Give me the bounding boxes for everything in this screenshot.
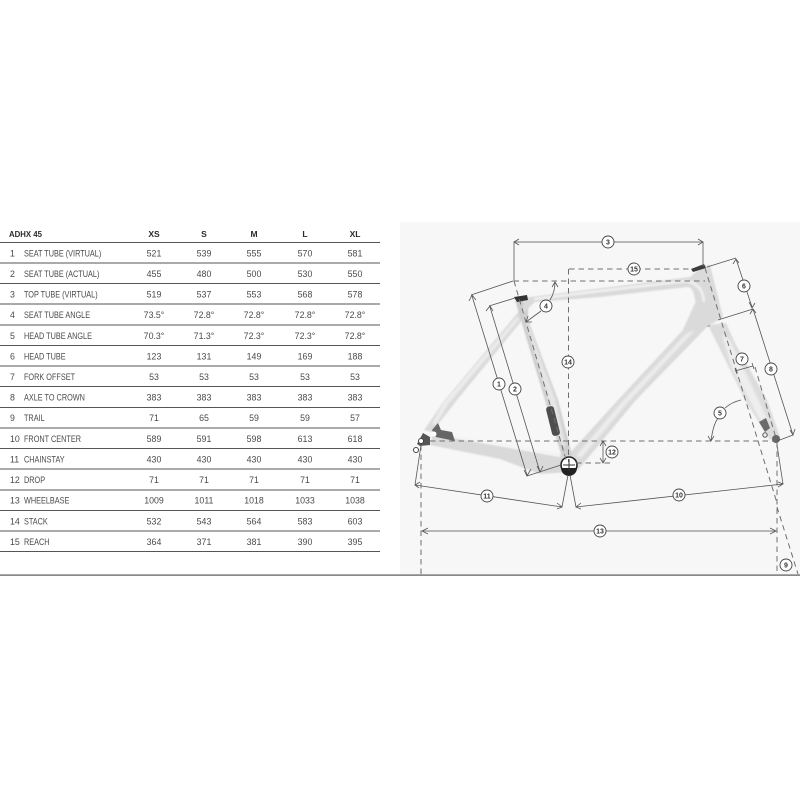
row 12 drop: 71: [300, 475, 310, 485]
dimension 7 fork offset: [735, 363, 754, 374]
table header: XL: [350, 229, 360, 239]
row 8 axle to crown: 383: [348, 392, 362, 402]
marker 14: 14: [564, 360, 572, 366]
row 3 top tube virtual: [10, 290, 362, 300]
marker 13: [594, 525, 606, 537]
dimension 8 axle to crown: [750, 309, 795, 441]
table header: M: [250, 229, 258, 239]
row 7 fork offset: 53: [149, 372, 159, 382]
row 12 drop: DROP: [24, 475, 45, 485]
marker 2: [509, 383, 521, 395]
row 1 seat tube virtual: 521: [147, 248, 161, 258]
marker 12: [606, 446, 618, 458]
row 10 front center: 598: [247, 434, 261, 444]
row 6 head tube: [10, 352, 362, 362]
row 5 head tube angle: 72.8°: [345, 331, 365, 341]
row 3 top tube virtual: 519: [147, 290, 161, 300]
row 4 seat tube angle: 72.8°: [345, 310, 365, 320]
row 5 head tube angle: 72.3°: [244, 331, 264, 341]
marker 12: 12: [608, 450, 616, 456]
row 8 axle to crown: 383: [247, 392, 261, 402]
marker 9: [780, 559, 792, 571]
row 15 reach: 390: [298, 537, 312, 547]
marker 4: 4: [544, 304, 548, 310]
row 12 drop: 71: [199, 475, 209, 485]
row 14 stack: STACK: [24, 517, 48, 527]
number markers: [481, 236, 792, 571]
row 10 front center: 613: [298, 434, 312, 444]
row 4 seat tube angle: 73.5°: [144, 310, 164, 320]
dimension 13 wheelbase: [422, 528, 776, 534]
dimension 2 seat tube actual: [486, 298, 543, 472]
row 10 front center: 591: [197, 434, 211, 444]
marker 7: 7: [740, 356, 744, 364]
row 14 stack: [10, 516, 362, 527]
marker 7: [736, 353, 748, 365]
row 8 axle to crown: 383: [147, 392, 161, 402]
marker 10: 10: [675, 492, 683, 500]
row 8 axle to crown: 8: [10, 392, 15, 402]
crosshair on bottom bracket: [563, 459, 575, 471]
row 11 chainstay: 430: [247, 454, 261, 464]
row 6 head tube: 131: [197, 352, 211, 362]
row 9 trail: 71: [149, 413, 159, 423]
marker 6: [738, 280, 750, 292]
table header: S: [201, 229, 207, 239]
row 7 fork offset: 53: [249, 372, 259, 382]
dropouts: [414, 423, 455, 452]
row 14 stack: 14: [10, 516, 20, 526]
marker 4: [540, 300, 552, 312]
marker 2: 2: [513, 386, 517, 394]
row 1 seat tube virtual: 1: [10, 248, 15, 258]
marker 3: 3: [606, 240, 610, 246]
table rules: [0, 242, 380, 552]
row 5 head tube angle: 72.3°: [295, 331, 315, 341]
row 1 seat tube virtual: 570: [298, 248, 312, 258]
table header: XS: [148, 229, 160, 239]
row 1 seat tube virtual: 581: [348, 248, 362, 258]
dimension 11 chainstay: [415, 445, 568, 509]
dashed reference lines: [421, 268, 798, 575]
dimension 4 seat angle arcs: [526, 282, 558, 322]
row 1 seat tube virtual: [10, 248, 362, 259]
row 12 drop: 71: [249, 475, 259, 485]
row 5 head tube angle: 5: [10, 331, 15, 341]
panel: diagram background: [400, 222, 800, 575]
row 12 drop: 12: [10, 475, 20, 485]
row 8 axle to crown: AXLE TO CROWN: [24, 393, 85, 403]
row 4 seat tube angle: 72.8°: [295, 310, 315, 320]
row 6 head tube: 169: [298, 352, 312, 362]
marker 13: 13: [596, 528, 604, 536]
row 4 seat tube angle: 72.8°: [194, 310, 214, 320]
row 7 fork offset: 53: [300, 372, 310, 382]
row 2 seat tube actual: 550: [348, 269, 362, 279]
row 14 stack: 583: [298, 516, 312, 526]
row 2 seat tube actual: 480: [197, 269, 211, 279]
row 11 chainstay: 430: [298, 454, 312, 464]
row 7 fork offset: 53: [350, 372, 360, 382]
row 15 reach: 15: [10, 537, 20, 547]
row 10 front center: 10: [10, 434, 20, 444]
row 8 axle to crown: 383: [298, 392, 312, 402]
geometry table: [0, 229, 380, 552]
row 10 front center: [10, 434, 362, 444]
marker 8: 8: [769, 366, 773, 374]
row 15 reach: REACH: [24, 537, 50, 547]
row 2 seat tube actual: SEAT TUBE (ACTUAL): [24, 269, 100, 279]
marker 15: 15: [630, 266, 638, 274]
row 2 seat tube actual: 500: [247, 269, 261, 279]
down tube: [568, 303, 707, 470]
row 9 trail: 57: [350, 413, 360, 423]
bike frame: [414, 264, 780, 476]
row 9 trail: TRAIL: [24, 413, 45, 423]
dimension 5 head angle arc: [708, 400, 741, 441]
row 6 head tube: 188: [348, 352, 362, 362]
row 11 chainstay: [10, 454, 362, 465]
row 13 wheelbase: WHEELBASE: [24, 496, 70, 506]
row 13 wheelbase: 1033: [295, 496, 315, 506]
marker 9: 9: [784, 562, 788, 570]
row 1 seat tube virtual: 555: [247, 248, 261, 258]
row 1 seat tube virtual: 539: [197, 248, 211, 258]
marker 15: [628, 263, 640, 275]
row 5 head tube angle: 70.3°: [144, 331, 164, 341]
row 12 drop: [10, 475, 360, 485]
fork: [706, 323, 780, 443]
row 15 reach: 364: [147, 537, 161, 547]
row 15 reach: [10, 537, 362, 547]
row 1 seat tube virtual: SEAT TUBE (VIRTUAL): [24, 249, 102, 259]
row 10 front center: 589: [147, 434, 161, 444]
marker 5: [714, 407, 726, 419]
row 11 chainstay: CHAINSTAY: [24, 455, 65, 465]
row 3 top tube virtual: 3: [10, 290, 15, 300]
row 9 trail: 65: [199, 413, 209, 423]
seat stay: [424, 310, 524, 432]
row 5 head tube angle: 71.3°: [194, 331, 214, 341]
row 9 trail: 9: [10, 413, 15, 423]
seat tube: [515, 300, 572, 457]
row 3 top tube virtual: 568: [298, 290, 312, 300]
row 12 drop: 71: [350, 475, 360, 485]
table header: [9, 229, 360, 239]
row 2 seat tube actual: 455: [147, 269, 161, 279]
row 2 seat tube actual: [10, 269, 362, 279]
row 4 seat tube angle: 72.8°: [244, 310, 264, 320]
row 15 reach: 381: [247, 537, 261, 547]
marker 1: [493, 378, 505, 390]
dimension 1 seat tube virtual: [469, 281, 561, 476]
row 13 wheelbase: [10, 496, 365, 506]
row 6 head tube: HEAD TUBE: [24, 352, 66, 362]
row 7 fork offset: 7: [10, 372, 15, 382]
row 11 chainstay: 430: [348, 454, 362, 464]
row 13 wheelbase: 1018: [244, 496, 264, 506]
row 13 wheelbase: 1009: [144, 496, 164, 506]
table header: ADHX 45: [9, 230, 42, 239]
row 13 wheelbase: 1038: [345, 496, 365, 506]
row 4 seat tube angle: SEAT TUBE ANGLE: [24, 310, 91, 320]
row 13 wheelbase: 1011: [195, 496, 214, 506]
marker 10: [673, 489, 685, 501]
dimension 12 drop: [600, 441, 606, 463]
bottom bracket: [561, 457, 577, 476]
dimension 6 head tube: [707, 258, 755, 320]
row 3 top tube virtual: TOP TUBE (VIRTUAL): [24, 290, 98, 300]
table header: L: [302, 229, 308, 239]
row 10 front center: FRONT CENTER: [24, 434, 81, 444]
row 13 wheelbase: 13: [10, 496, 20, 506]
dimension 10 front center: [570, 445, 783, 509]
bottom rule: [0, 574, 800, 576]
dimension 3 top tube arrow: [514, 239, 703, 281]
row 5 head tube angle: HEAD TUBE ANGLE: [24, 331, 93, 341]
row 15 reach: 371: [197, 537, 211, 547]
marker 1: 1: [497, 382, 501, 388]
row 3 top tube virtual: 553: [247, 290, 261, 300]
row 4 seat tube angle: [10, 310, 365, 320]
row 11 chainstay: 11: [10, 454, 19, 464]
row 9 trail: 59: [300, 413, 310, 423]
row 7 fork offset: [10, 372, 360, 382]
row 10 front center: 618: [348, 434, 362, 444]
row 8 axle to crown: [10, 392, 362, 403]
chainstay: [430, 433, 570, 474]
row 11 chainstay: 430: [197, 454, 211, 464]
row 6 head tube: 123: [147, 352, 161, 362]
marker 3: [602, 236, 614, 248]
row 3 top tube virtual: 578: [348, 290, 362, 300]
row 6 head tube: 6: [10, 352, 15, 362]
marker 8: [765, 363, 777, 375]
marker 5: 5: [718, 410, 722, 418]
row 7 fork offset: FORK OFFSET: [24, 372, 75, 382]
row 14 stack: 532: [147, 516, 161, 526]
row 9 trail: 59: [249, 413, 259, 423]
row 14 stack: 603: [348, 516, 362, 526]
row 14 stack: 564: [247, 516, 261, 526]
row 8 axle to crown: 383: [197, 392, 211, 402]
row 3 top tube virtual: 537: [197, 290, 211, 300]
row 9 trail: [10, 413, 360, 423]
row 2 seat tube actual: 530: [298, 269, 312, 279]
row 7 fork offset: 53: [199, 372, 209, 382]
row 5 head tube angle: [10, 331, 365, 341]
marker 11: [481, 490, 493, 502]
row 2 seat tube actual: 2: [10, 269, 15, 279]
marker 11: 11: [483, 494, 491, 500]
row 15 reach: 395: [348, 537, 362, 547]
top tube and head tube: [514, 264, 723, 330]
row 12 drop: 71: [149, 475, 159, 485]
row 11 chainstay: 430: [147, 454, 161, 464]
marker 6: 6: [742, 284, 746, 290]
row 4 seat tube angle: 4: [10, 310, 15, 320]
marker 14: [562, 356, 574, 368]
row 14 stack: 543: [197, 516, 211, 526]
row 6 head tube: 149: [247, 352, 261, 362]
